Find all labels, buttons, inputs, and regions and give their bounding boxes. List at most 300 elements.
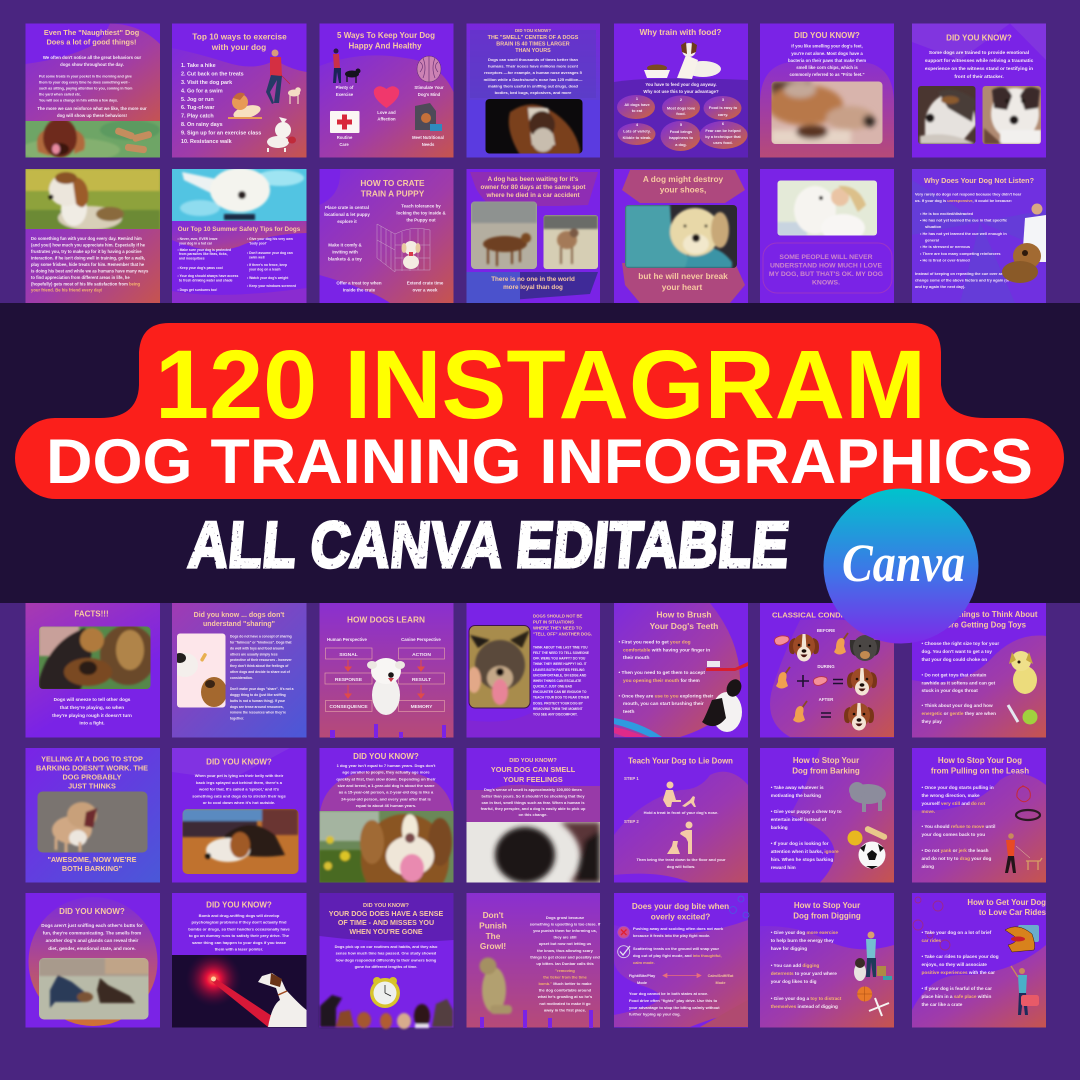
panel: destroy your shoes xyxy=(614,169,748,303)
panel background xyxy=(320,24,454,158)
photo cut-out: vet and dog xyxy=(1002,204,1046,283)
body text: ENCOUNTER CAN BE ENOUGH TO xyxy=(533,690,587,694)
panel: stop digging xyxy=(760,893,894,1028)
panel: frito feet xyxy=(760,24,894,158)
left tips: • Your dog should always have access xyxy=(178,274,239,278)
body text: change some of the above factors and try again (or stop xyxy=(915,278,1019,282)
body text: WHEN THINGS CAN ESCALATE xyxy=(533,679,581,683)
panel background xyxy=(466,893,600,1028)
body text: up bitten. Ian Dunbar calls this xyxy=(536,961,594,966)
icon: Canva logo: Canva xyxy=(842,533,965,593)
icon: paw prints xyxy=(730,896,749,918)
heading: JUST THINKS xyxy=(68,782,116,791)
panel: sploot xyxy=(172,748,306,882)
body text: general xyxy=(925,238,939,242)
icon: terrier sitting xyxy=(480,958,512,1014)
icon: food bag xyxy=(415,103,442,131)
icon: first aid box xyxy=(330,111,360,133)
heading xyxy=(36,755,148,791)
tips: have for digging xyxy=(771,946,807,951)
reason bubbles: Kibble to steak. xyxy=(623,135,651,140)
mode labels: Calm/Sniff/Eat xyxy=(708,974,734,978)
heading: Dog from Digging xyxy=(793,912,861,920)
callout box xyxy=(763,243,892,293)
heading: 5 Things to Think About xyxy=(948,610,1038,619)
heading: YOUR DOG DOES HAVE A SENSE xyxy=(329,910,443,918)
tips: attention when it barks, ignore xyxy=(771,849,839,854)
panel background xyxy=(320,603,454,738)
body text: others are usually simply less xyxy=(230,652,278,656)
body text: receptors —for example, a human nose averages 5 xyxy=(484,70,583,75)
panel background xyxy=(614,893,748,1028)
icon: white dog xyxy=(367,658,405,715)
tips: locational & let puppy xyxy=(324,212,370,217)
tips: rawhide as it softens and can get xyxy=(922,680,996,686)
body text: Some dogs are trained to provide emotional xyxy=(929,50,1029,56)
panel background xyxy=(912,24,1046,158)
panel background xyxy=(760,893,894,1028)
panel background xyxy=(760,24,894,158)
heading: 5 Ways To Keep Your Dog xyxy=(337,31,435,40)
body text xyxy=(230,634,294,721)
body text: play some frisbee, hide treats for him. Remember that he xyxy=(31,262,145,267)
body text: humans. Their noses have millions more scent xyxy=(488,64,579,68)
body text: on this change. xyxy=(519,812,547,817)
left tips xyxy=(178,237,239,292)
heading xyxy=(793,901,861,920)
body text xyxy=(335,944,438,969)
heading: Before Getting Dog Toys xyxy=(934,620,1027,630)
body text xyxy=(788,44,866,77)
icon: crossed bones xyxy=(869,998,889,1016)
body text: REMOVING THEM THE MOMENT xyxy=(533,707,583,711)
icon: soccer ball xyxy=(858,842,886,869)
tips: comfortable with having your finger in xyxy=(623,648,710,654)
tips: Extend crate time xyxy=(407,280,444,286)
left tips: to fresh drinking water and shade xyxy=(179,278,233,282)
right tips: • Don't assume your dog can xyxy=(247,251,293,255)
closing text: BOTH BARKING" xyxy=(62,864,122,873)
body text: consideration. xyxy=(230,676,253,680)
heading: How to Stop Your xyxy=(794,901,860,910)
body text: Don't make your dogs "share". It's not a xyxy=(230,687,294,691)
panel: emotional support dogs xyxy=(912,24,1046,158)
numbered list: 6. Tug-of-war xyxy=(181,105,215,111)
icon: heart xyxy=(374,86,399,108)
panel: dog years xyxy=(320,748,454,882)
body text: you punish them for informing us, xyxy=(533,928,597,933)
tips: • If your dog is fearful of the car xyxy=(922,986,992,991)
body text: • There are too many competing reinforcers xyxy=(920,251,1000,256)
panel background xyxy=(320,169,454,303)
tips: • Think about your dog and how xyxy=(922,703,993,708)
tips: dog. You don't want to get a toy xyxy=(922,649,992,654)
closing text: "AWESOME, NOW WE'RE xyxy=(47,855,137,864)
panel background xyxy=(466,603,600,738)
tips: • Once they are use to you exploring their xyxy=(618,694,713,700)
mode labels: Fight/Bite/Play xyxy=(629,974,656,978)
numbered list: 1. Take a hike xyxy=(181,63,216,69)
right tips: • If there's no fence, keep xyxy=(247,263,287,267)
body text: back legs splayed out behind them, there's a xyxy=(196,780,283,785)
tips: inside the crate xyxy=(343,288,376,292)
body text: bacteria on their paws that make them xyxy=(788,58,866,63)
tips: yourself very still and do not xyxy=(922,801,986,806)
heading: Dog from Barking xyxy=(792,766,860,776)
heading: Teach Your Dog to Lie Down xyxy=(628,756,733,765)
panel background xyxy=(26,169,160,303)
body text: your advantage to stop the biting calmly without xyxy=(629,1005,720,1010)
panel background xyxy=(172,893,306,1028)
body text: doggy thing to do (just like sniffing xyxy=(230,693,286,697)
body text: same thing can happen to your dogs if you tease xyxy=(192,940,287,945)
panel: summer safety tips xyxy=(172,168,306,303)
tips: barking xyxy=(771,825,788,830)
quote text: KNOWS. xyxy=(812,280,840,286)
reason bubbles: Food is easy to xyxy=(709,105,738,110)
heading xyxy=(44,28,139,46)
body text: protective of their resources - however xyxy=(230,658,292,662)
heading: OF TIME - AND MISSES YOU xyxy=(338,919,434,927)
tips: • You can add digging xyxy=(771,963,819,968)
tips: Make it comfy & xyxy=(328,242,363,248)
tips: the Puppy out xyxy=(406,218,436,222)
body text: for "fairness" or "kindness". Dogs that xyxy=(230,640,292,644)
closing text: There is no one in the world xyxy=(491,276,575,283)
panel: some people will never understand xyxy=(760,169,894,303)
heading xyxy=(337,31,435,50)
icon: man and dog xyxy=(854,932,892,981)
icon: Canva logo xyxy=(824,488,978,644)
heading xyxy=(643,174,724,194)
flow labels xyxy=(329,652,433,710)
panel background xyxy=(26,603,160,738)
photo: dogs with bone xyxy=(177,634,226,708)
heading: PUT IN SITUATIONS xyxy=(533,620,574,625)
panel background xyxy=(912,169,1046,303)
tips: motivating the barking xyxy=(771,793,821,798)
photo: barking puppy xyxy=(38,792,148,853)
labels: Love and xyxy=(377,110,396,115)
body text: smell like corn chips, which is xyxy=(796,65,858,70)
photo: bulldog on black xyxy=(486,99,582,155)
heading: DID YOU KNOW? xyxy=(206,901,272,910)
heading: understand "sharing" xyxy=(203,621,275,628)
tips: locking the toy inside & xyxy=(396,210,446,216)
reason bubbles: food. xyxy=(676,111,686,116)
tips: your dog comes back to you xyxy=(922,832,985,837)
panel background xyxy=(614,748,748,882)
body text: When your pet is lying on their belly with their xyxy=(195,773,284,778)
heading: A dog might destroy xyxy=(643,174,724,184)
heading: HOW TO CRATE xyxy=(360,178,425,188)
heading: DID YOU KNOW? xyxy=(509,758,557,764)
tip text: Put some treats in your pocket in the morning and give xyxy=(39,74,132,78)
reason bubbles: by a technique that xyxy=(705,134,741,139)
body text: (hopefully) gets most of his life satisfaction from being xyxy=(31,282,141,286)
body text: word for that. It's called a 'sploot,' and it's xyxy=(198,787,280,792)
tips: enjoys, so they will associate xyxy=(922,962,987,967)
panel: your dog can smell your feelings xyxy=(466,748,600,883)
heading: Don't xyxy=(483,910,504,920)
body text: equal to about 46 human years. xyxy=(356,803,416,808)
body text: other dogs and decide to share out of xyxy=(230,670,291,674)
heading: Does your dog bite when xyxy=(632,902,729,911)
tips xyxy=(771,785,842,870)
body text: • He is tired or over-trained xyxy=(920,258,970,262)
body text: Dogs will sneeze to tell other dogs xyxy=(54,697,131,702)
panel background xyxy=(614,169,748,303)
icon: yellow dog xyxy=(1009,651,1037,694)
heading: YELLING AT A DOG TO STOP xyxy=(41,755,143,764)
body text: to find appreciation from different areas in life, he xyxy=(31,275,130,280)
photo frame xyxy=(469,626,530,708)
heading xyxy=(194,612,285,628)
panel background xyxy=(320,748,454,882)
body text: better than yours. So it shouldn't be shocking that they xyxy=(481,794,585,798)
heading: How to Get Your Dog xyxy=(967,898,1046,907)
flow arrows xyxy=(345,660,424,698)
step 2 label: STEP 2 xyxy=(624,819,639,824)
reason bubbles: All dogs have xyxy=(624,102,650,107)
body text: quickly at first, then slow down. Depending on their xyxy=(336,776,436,782)
tips: • Choose the right size toy for your xyxy=(922,641,999,646)
left tips: and mosquitoes xyxy=(179,256,205,260)
numbered list: 9. Sign up for an exercise class xyxy=(181,130,261,136)
tips: stuck in your dogs throat xyxy=(922,688,978,693)
heading: DID YOU KNOW? xyxy=(946,34,1012,42)
reason bubbles: 3 xyxy=(722,97,725,102)
heading: your shoes, xyxy=(660,184,706,194)
panel background xyxy=(912,748,1046,882)
numbered list: 3. Visit the dog park xyxy=(181,80,232,86)
panel: anal glands xyxy=(26,893,160,1028)
body text: (and you!) how much you appreciate him. Especially if he xyxy=(31,243,146,248)
tips: • Take away whatever is xyxy=(771,785,824,790)
tip text: You will see a change in him within a few days. xyxy=(39,98,118,102)
tips: Place crate in central xyxy=(325,205,369,210)
icon: barking dog xyxy=(849,782,886,812)
heading: DID YOU KNOW? xyxy=(353,752,419,761)
body text: the know, thus allowing scary xyxy=(537,948,594,953)
body text: they're playing rough it doesn't turn xyxy=(52,713,132,718)
body text: million while a Dachshund's nose has 125 million— xyxy=(484,77,583,82)
body text: the dog comfortable around xyxy=(539,988,592,993)
body text: or to cool down when it's hot outside. xyxy=(203,800,275,805)
icon: basketball xyxy=(857,986,872,1002)
tips xyxy=(618,640,713,715)
icon: orange cartoon dog xyxy=(228,93,262,121)
heading: Why Does Your Dog Not Listen? xyxy=(924,176,1034,185)
closing text xyxy=(47,855,137,873)
tip text: them to your dog every time he does something well - xyxy=(39,80,130,84)
body text: commonly referred to as "Frito feet." xyxy=(790,72,864,77)
heading xyxy=(934,610,1038,630)
photo: dog nose close-up xyxy=(466,822,600,883)
heading: Does a lot of good things! xyxy=(46,38,136,46)
numbered list xyxy=(181,63,261,145)
heading xyxy=(967,898,1047,917)
body text: to go on dummy runs to satisfy their prey drive. The xyxy=(189,933,290,938)
body text: Do something fun with your dog every day. Remind him xyxy=(31,236,142,241)
icon: check xyxy=(618,946,630,958)
heading: How to Stop Your xyxy=(793,756,859,765)
labels: Exercise xyxy=(336,92,354,97)
photo: dog and biscuits xyxy=(26,121,160,158)
body text: how dogs responded differently to their owners being xyxy=(336,957,437,962)
body text: THINK ABOUT THE LAST TIME YOU xyxy=(533,646,588,650)
panel background xyxy=(172,169,306,303)
body text: bombs or drugs, so their handlers occasionally have xyxy=(188,926,290,932)
reason bubbles: 4 xyxy=(636,122,639,127)
photo: dog nose and paw xyxy=(767,81,882,144)
panel: facts xyxy=(26,603,160,738)
tips: and do not try to drag your dog xyxy=(922,856,991,861)
tips: move. xyxy=(922,809,935,814)
tips: reward him xyxy=(771,865,796,870)
heading xyxy=(481,176,586,199)
body text: psychological problems if they don't actually find xyxy=(192,920,287,925)
heading xyxy=(491,758,576,784)
tips: positive experiences with the car xyxy=(922,970,995,975)
heading: WHERE THEY NEED TO xyxy=(533,626,582,631)
photo: dog on snowy road xyxy=(543,215,598,269)
body text xyxy=(52,697,132,726)
numbered list: 7. Play catch xyxy=(181,114,214,120)
panel: yelling at a dog xyxy=(26,748,160,882)
heading: WHEN YOU'RE GONE xyxy=(349,928,423,936)
closing text xyxy=(638,271,728,292)
tip text xyxy=(39,74,132,102)
tips: inviting with xyxy=(332,250,358,254)
body text: further hyping up your dog. xyxy=(629,1012,681,1016)
labels: Dog's Mind xyxy=(418,92,441,97)
tips: • You should refuse to move until xyxy=(922,824,995,829)
tips: • Do not yank or jerk the leash xyxy=(922,848,989,853)
right tips xyxy=(247,237,296,288)
mode labels: Mode xyxy=(716,981,725,985)
icon: brain xyxy=(417,56,441,82)
reason bubbles: 6 xyxy=(722,121,725,126)
body text: something is upsetting is too close. If xyxy=(530,922,601,927)
panel: things to think about getting dog toys xyxy=(912,603,1046,738)
subtitle: dog training infographics: DOG TRAINING INFOGRAPHICS xyxy=(46,427,1033,497)
heading: Our Top 10 Summer Safety Tips for Dogs xyxy=(178,226,301,233)
tips: energetic or gentle they are when xyxy=(922,711,996,716)
tips: blankets & a toy xyxy=(328,256,362,262)
tips: along xyxy=(922,864,934,869)
reason bubbles: Most dogs love xyxy=(667,106,696,110)
tips: entertain itself instead of xyxy=(771,817,827,822)
body text: LEAVES BOTH PARTIES FEELING xyxy=(533,668,585,672)
tips: • Once your dog starts pulling in xyxy=(922,785,994,790)
body text: dogs are tense around resources, xyxy=(230,705,284,709)
body text: • He has not yet learned the cue in that specific xyxy=(920,218,1008,222)
double arrow xyxy=(663,974,701,978)
body text: you're not alone. Most dogs have a xyxy=(791,51,863,56)
photo: beagle in grass xyxy=(25,169,160,230)
body text: upset but now not letting us xyxy=(539,941,592,946)
icon: paw prints xyxy=(913,897,950,950)
body text: fearful, they perspire, and a dog is easily able to pick up xyxy=(481,806,586,811)
step 1 text: Hold a treat in front of your dog's nose. xyxy=(644,810,718,815)
heading: owner for 80 days at the same spot xyxy=(481,184,586,191)
body text: diet, gender, emotional state, and more. xyxy=(48,946,136,951)
body text xyxy=(192,773,287,805)
heading: THE "SMELL" CENTER OF A DOGS xyxy=(488,35,579,41)
body text: OFF. WERE YOU HAPPY? DO YOU xyxy=(533,657,586,661)
left tips: from parasites like fleas, ticks, xyxy=(179,252,228,256)
comparison text: calm mode. xyxy=(633,960,655,965)
reason bubbles: to eat xyxy=(632,108,643,113)
during row xyxy=(776,667,877,696)
icon: dog in car window xyxy=(1005,925,1039,952)
heading xyxy=(650,610,718,631)
body text: Dogs aren't just sniffing each other's butts for xyxy=(41,923,143,928)
tips: Teach tolerance by xyxy=(401,204,441,208)
icon: person with carrier xyxy=(1011,966,1039,1015)
quote text: MY DOG, BUT THAT'S OK. MY DOG xyxy=(769,271,883,278)
tips xyxy=(922,930,999,1007)
tips: their mouth xyxy=(623,655,649,661)
panel: stop barking xyxy=(760,748,894,882)
tips: that your dog could choke on xyxy=(922,657,987,662)
step 2 text: dog will follow. xyxy=(667,864,695,869)
body text: sense how much time has passed. One study showed xyxy=(336,951,437,956)
body text: support for witnesses while reliving a traumatic xyxy=(925,58,1034,64)
body text: FELT THE NEED TO TELL SOMEONE xyxy=(533,651,589,655)
labels: Plenty of xyxy=(336,85,354,90)
photo: two dogs in field xyxy=(39,958,149,1020)
body text: • He is too excited/distracted xyxy=(920,211,974,216)
labels: Affection xyxy=(377,116,396,122)
heading: Growl! xyxy=(480,941,506,951)
panel: smell center of the brain xyxy=(466,24,600,158)
right tips: your dog on a leash xyxy=(249,268,281,272)
body text: Dogs growl because xyxy=(546,915,585,920)
panel background xyxy=(26,748,160,882)
icon: crate with puppy xyxy=(377,224,430,272)
panel: 5 ways to keep your dog happy xyxy=(320,24,454,158)
tips: the wrong direction, make xyxy=(922,793,980,798)
icon: tennis ball and bone toy xyxy=(1008,705,1038,724)
body text: • He has not yet learned the cue well enough in xyxy=(920,231,1007,236)
panel: why does your dog not listen xyxy=(912,169,1046,303)
heading: BARKING DOESN'T WORK. THE xyxy=(36,764,148,773)
heading: The xyxy=(486,931,501,941)
body text: remove the resources when they're xyxy=(230,711,286,715)
tips: • Take your dog on a lot of brief xyxy=(922,930,992,935)
panel background xyxy=(26,893,160,1028)
panel: dogs don't understand sharing xyxy=(172,603,306,738)
heading: How to Brush xyxy=(656,610,712,620)
tips: him. When he stops barking xyxy=(771,857,833,862)
icon: toothbrush xyxy=(706,661,748,671)
comparison text: dog out of play fight mode, and into thoughtful, xyxy=(633,953,722,958)
body text: experience on the witness stand or testifying in xyxy=(925,66,1033,72)
body text: butts is not a human thing). If your xyxy=(230,699,286,703)
panel background xyxy=(614,603,748,738)
heading: DID YOU KNOW? xyxy=(363,903,410,909)
panel: sense of time xyxy=(320,893,454,1029)
tips xyxy=(922,641,999,724)
tip text: such as sitting, paying attention to you, coming in from xyxy=(39,86,132,90)
tips: themselves instead of digging xyxy=(771,1004,838,1009)
tips: to help burn the energy they xyxy=(771,938,834,943)
flow labels: CONSEQUENCE xyxy=(329,704,368,710)
body text: If you like smelling your dog's feet, xyxy=(791,44,863,48)
heading: How to Stop Your Dog xyxy=(938,756,1022,765)
